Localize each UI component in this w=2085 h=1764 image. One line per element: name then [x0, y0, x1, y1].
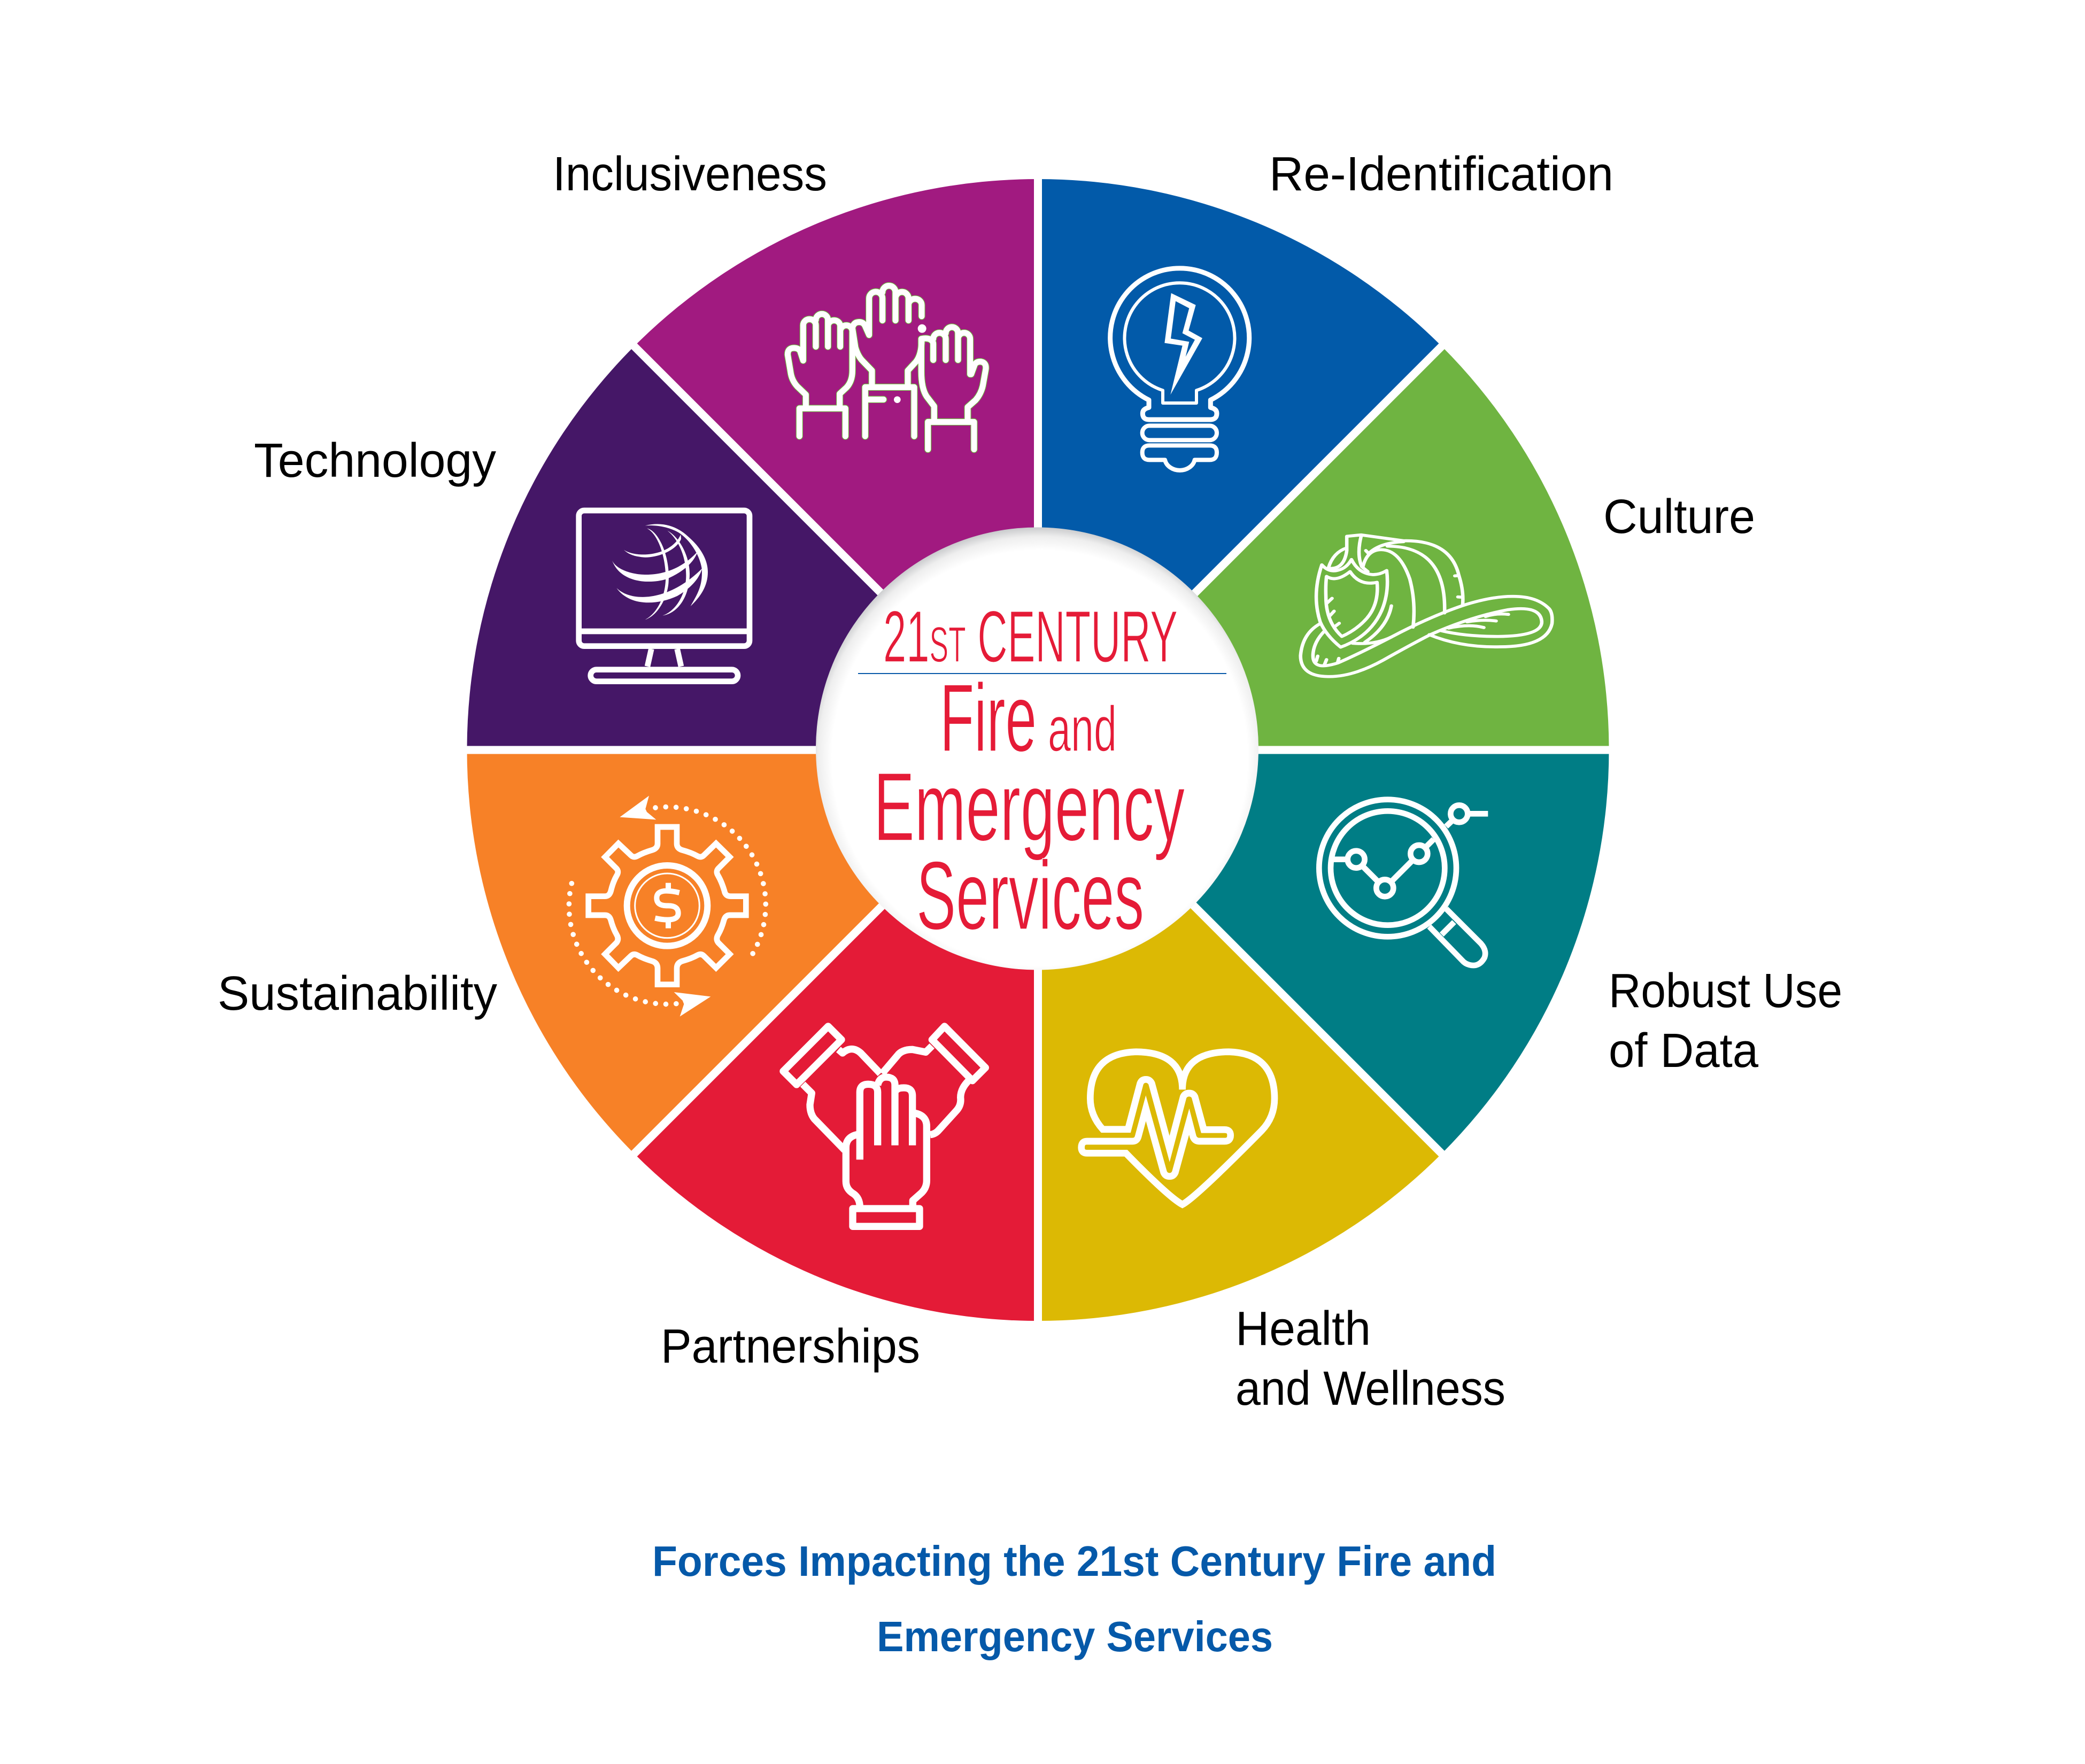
- label: Re-Identification: Re-Identification: [1269, 148, 1613, 201]
- icon: interlocked hands: [783, 1026, 985, 1226]
- segment: Sustainability: [467, 750, 1038, 1154]
- icon: light bulb with lightning bolt: [1110, 268, 1249, 470]
- label: Robust Use of Data: of Data: [1609, 1024, 1759, 1078]
- segment: Health and Wellness: [1038, 750, 1442, 1321]
- label: Health and Wellness: and Wellness: [1235, 1362, 1505, 1415]
- segment: Robust Use of Data: [1038, 750, 1609, 1154]
- icon: heart with pulse line: [1082, 1052, 1275, 1204]
- label: Robust Use of Data: Robust Use: [1609, 964, 1842, 1018]
- icon: firefighter helmet: [1301, 535, 1552, 677]
- label: Sustainability: Sustainability: [218, 967, 497, 1020]
- label: Culture: Culture: [1603, 490, 1755, 544]
- caption: Emergency Services: [877, 1613, 1273, 1660]
- centre title: Services: Services: [916, 841, 1144, 950]
- centre title divider: [858, 673, 1226, 674]
- label: Inclusiveness: Inclusiveness: [553, 148, 827, 201]
- centre title: Emergency: Emergency: [874, 752, 1185, 861]
- caption: Forces Impacting the 21st Century Fire and: [652, 1537, 1496, 1585]
- label: Robust Use of Data: [1609, 964, 1842, 1078]
- centre title: Fire and: and: [1048, 693, 1117, 765]
- segment: Inclusiveness: [634, 179, 1038, 750]
- label: Health and Wellness: Health: [1235, 1302, 1371, 1356]
- segment: Technology: [467, 346, 1038, 750]
- segment: Culture: [1038, 346, 1609, 750]
- centre title: Fire and: Fire: [940, 664, 1037, 772]
- label: Health and Wellness: [1235, 1302, 1505, 1415]
- icon: magnifying glass over line chart: [1319, 800, 1488, 965]
- icon: computer monitor with globe: [579, 510, 750, 682]
- label: Technology: Technology: [254, 434, 496, 488]
- icon: gear with dollar sign and circular arrows: [569, 796, 766, 1017]
- label: Partnerships: Partnerships: [661, 1320, 920, 1373]
- caption: [652, 1537, 1496, 1660]
- icon: raised hands: [787, 285, 986, 450]
- wheel: eight coloured segments: [460, 171, 1617, 1329]
- centre title: 21st Century: 21ST CENTURY: [883, 596, 1178, 678]
- centre hub circle: [816, 527, 1258, 970]
- segment: Partnerships: [634, 750, 1038, 1321]
- segment: Re-Identification: [1038, 179, 1442, 750]
